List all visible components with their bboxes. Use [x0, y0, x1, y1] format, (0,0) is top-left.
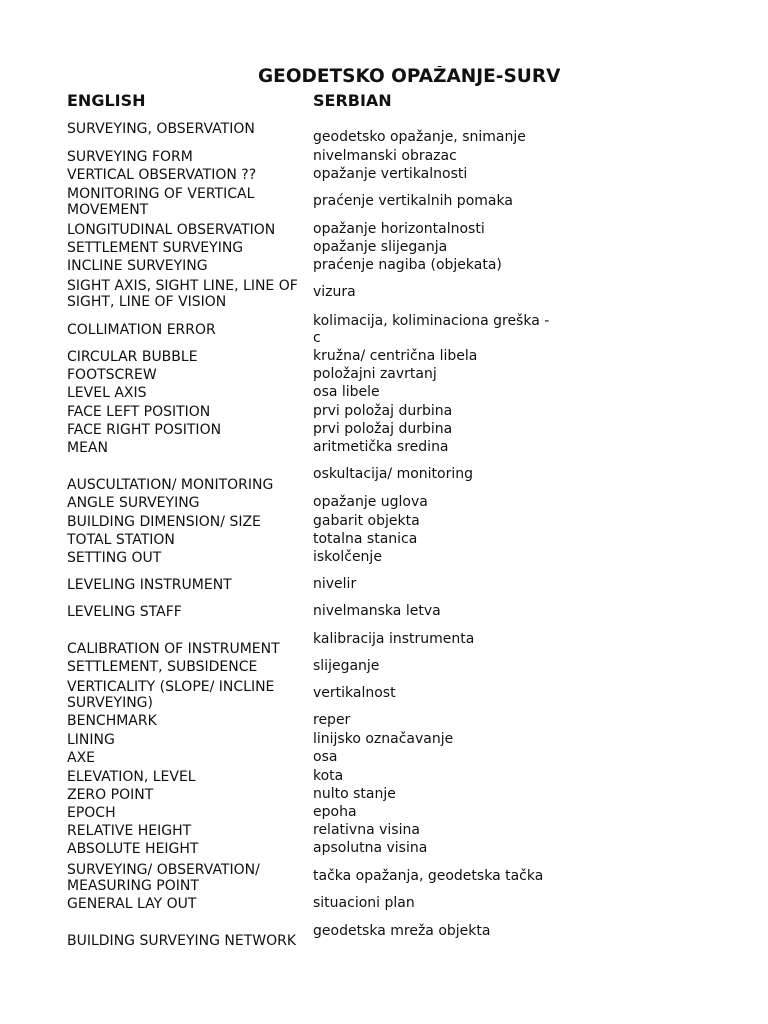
glossary table: SIGHT, LINE OF VISION	[67, 294, 226, 310]
glossary table: osa	[313, 749, 337, 765]
glossary table: LEVELING INSTRUMENT	[67, 577, 232, 593]
glossary table: MEAN	[67, 440, 108, 456]
glossary table: položajni zavrtanj	[313, 366, 437, 382]
glossary table: epoha	[313, 804, 357, 820]
glossary table: iskolčenje	[313, 549, 382, 565]
glossary table: geodetska mreža objekta	[313, 923, 490, 939]
glossary table: slijeganje	[313, 658, 379, 674]
glossary table: BENCHMARK	[67, 713, 157, 729]
glossary table: linijsko označavanje	[313, 731, 453, 747]
glossary table: SURVEYING/ OBSERVATION/	[67, 862, 260, 878]
glossary table: COLLIMATION ERROR	[67, 322, 216, 338]
glossary table: AXE	[67, 750, 95, 766]
glossary table: CIRCULAR BUBBLE	[67, 349, 198, 365]
glossary table: FACE RIGHT POSITION	[67, 422, 221, 438]
glossary table: reper	[313, 712, 350, 728]
glossary table: relativna visina	[313, 822, 420, 838]
glossary table: vizura	[313, 284, 356, 300]
glossary table: SURVEYING)	[67, 695, 153, 711]
glossary table: kolimacija, koliminaciona greška -	[313, 313, 549, 329]
glossary table: apsolutna visina	[313, 840, 427, 856]
glossary table: SIGHT AXIS, SIGHT LINE, LINE OF	[67, 278, 298, 294]
glossary table: SURVEYING FORM	[67, 149, 193, 165]
glossary table: VERTICAL OBSERVATION ??	[67, 167, 256, 183]
glossary table: c	[313, 330, 321, 346]
glossary table: BUILDING SURVEYING NETWORK	[67, 933, 296, 949]
glossary table: VERTICALITY (SLOPE/ INCLINE	[67, 679, 274, 695]
glossary table: MONITORING OF VERTICAL	[67, 186, 254, 202]
glossary table: EPOCH	[67, 805, 116, 821]
glossary table: aritmetička sredina	[313, 439, 449, 455]
glossary table: tačka opažanja, geodetska tačka	[313, 868, 543, 884]
glossary table: kota	[313, 768, 343, 784]
glossary table: prvi položaj durbina	[313, 403, 452, 419]
glossary table: nivelmanski obrazac	[313, 148, 457, 164]
glossary table: opažanje slijeganja	[313, 239, 447, 255]
glossary table: nivelmanska letva	[313, 603, 441, 619]
glossary table: LONGITUDINAL OBSERVATION	[67, 222, 275, 238]
glossary table: totalna stanica	[313, 531, 417, 547]
glossary table: vertikalnost	[313, 685, 396, 701]
glossary table: kalibracija instrumenta	[313, 631, 474, 647]
glossary table: praćenje nagiba (objekata)	[313, 257, 502, 273]
glossary table: osa libele	[313, 384, 380, 400]
glossary table: ABSOLUTE HEIGHT	[67, 841, 198, 857]
glossary table: praćenje vertikalnih pomaka	[313, 193, 513, 209]
glossary table: MEASURING POINT	[67, 878, 199, 894]
glossary table: TOTAL STATION	[67, 532, 175, 548]
glossary table: CALIBRATION OF INSTRUMENT	[67, 641, 280, 657]
glossary table: SETTLEMENT SURVEYING	[67, 240, 243, 256]
glossary table: GENERAL LAY OUT	[67, 896, 196, 912]
glossary table: ELEVATION, LEVEL	[67, 769, 196, 785]
glossary table: SETTING OUT	[67, 550, 161, 566]
glossary table: situacioni plan	[313, 895, 415, 911]
glossary table: gabarit objekta	[313, 513, 420, 529]
glossary table: AUSCULTATION/ MONITORING	[67, 477, 273, 493]
glossary table: ANGLE SURVEYING	[67, 495, 200, 511]
glossary table: opažanje horizontalnosti	[313, 221, 485, 237]
glossary table: LEVELING STAFF	[67, 604, 182, 620]
glossary table: RELATIVE HEIGHT	[67, 823, 191, 839]
glossary table: geodetsko opažanje, snimanje	[313, 129, 526, 145]
glossary table: prvi položaj durbina	[313, 421, 452, 437]
glossary table: oskultacija/ monitoring	[313, 466, 473, 482]
glossary table: BUILDING DIMENSION/ SIZE	[67, 514, 261, 530]
glossary table: FOOTSCREW	[67, 367, 157, 383]
glossary table: LEVEL AXIS	[67, 385, 147, 401]
glossary table: LINING	[67, 732, 115, 748]
glossary table: nulto stanje	[313, 786, 396, 802]
glossary table: FACE LEFT POSITION	[67, 404, 210, 420]
glossary table: SURVEYING, OBSERVATION	[67, 121, 255, 137]
glossary table: SETTLEMENT, SUBSIDENCE	[67, 659, 257, 675]
glossary table: ZERO POINT	[67, 787, 153, 803]
glossary table: opažanje uglova	[313, 494, 428, 510]
glossary table: kružna/ centrična libela	[313, 348, 477, 364]
glossary table: MOVEMENT	[67, 202, 148, 218]
header: english: ENGLISH	[67, 91, 146, 110]
glossary table: opažanje vertikalnosti	[313, 166, 467, 182]
header: serbian: SERBIAN	[313, 91, 392, 110]
glossary table: nivelir	[313, 576, 356, 592]
glossary table: INCLINE SURVEYING	[67, 258, 208, 274]
